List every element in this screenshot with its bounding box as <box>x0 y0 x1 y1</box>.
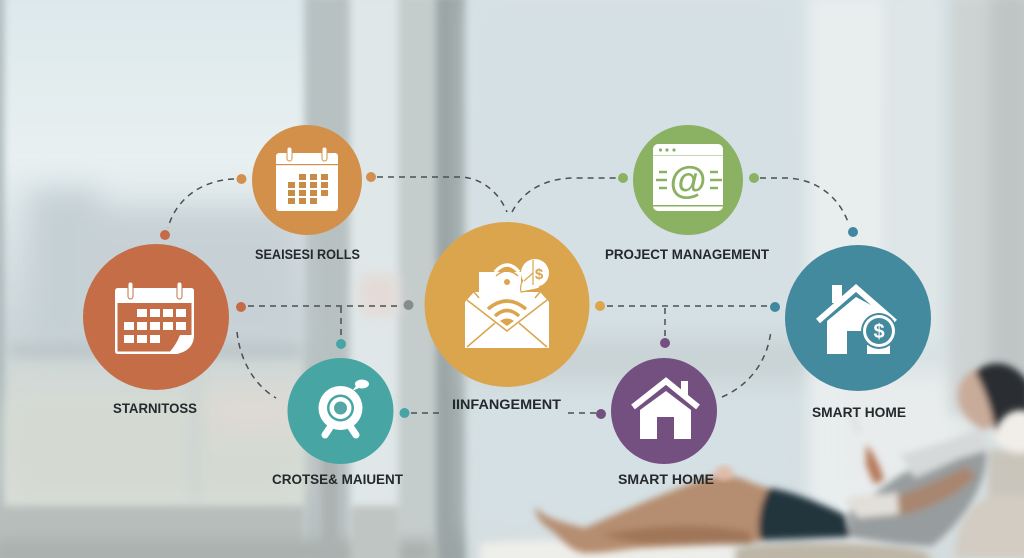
person relaxing on sofa <box>480 363 1024 558</box>
label: smart home blue: SMART HOME <box>812 405 906 420</box>
node: infangement <box>424 222 590 387</box>
connector: dashed lines <box>168 177 849 413</box>
icon: house with coin <box>818 285 897 354</box>
label: starnitoss: STARNITOSS <box>113 401 197 416</box>
node: starnitoss <box>83 244 229 390</box>
node: project management <box>633 125 743 235</box>
label: seaisesi rolls: SEAISESI ROLLS <box>255 247 360 262</box>
label: smart home purple: SMART HOME <box>618 472 714 487</box>
node: smart home blue <box>785 245 931 391</box>
icon: house with coin: $ <box>873 321 885 343</box>
icon: calendar with page curl <box>115 282 194 354</box>
connector: end dots <box>160 172 858 419</box>
label: crotse & maiuent: CROTSE& MAIUENT <box>272 472 404 487</box>
node: seaisesi rolls <box>252 125 362 235</box>
label: project management: PROJECT MANAGEMENT <box>605 247 770 262</box>
icon: envelope with wifi and coin <box>465 259 549 348</box>
icon: calendar <box>276 147 338 211</box>
node: smart home purple <box>611 358 717 464</box>
icon: webcam <box>318 380 369 435</box>
icon: house <box>633 381 698 439</box>
label: infangement: IINFANGEMENT <box>452 397 562 412</box>
icon: envelope with wifi and coin: $ <box>535 266 544 283</box>
icon: web at sign: @ <box>669 160 707 202</box>
node: crotse & maiuent <box>288 358 394 464</box>
